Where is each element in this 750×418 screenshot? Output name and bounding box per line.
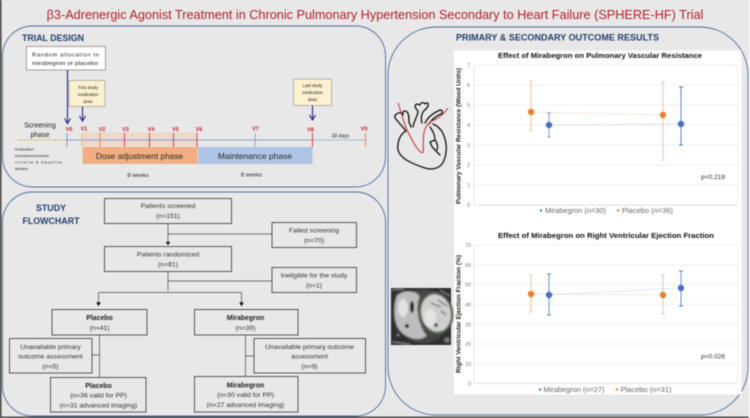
heading: study flowchart: STUDY: [36, 203, 67, 214]
box: ineligible: (n=1): [306, 282, 322, 290]
gridlines and axis: 60: [465, 263, 471, 269]
30 days label: 30 days: [332, 134, 350, 140]
box: first study medication dose: [69, 80, 105, 106]
visit labels: [66, 126, 367, 134]
visit labels: V9: [361, 126, 367, 132]
series: placebo: [528, 81, 666, 160]
icon: heart: [395, 103, 446, 169]
box: patients randomized: [104, 246, 232, 272]
dose adjustment phase bar: Dose adjustment phase: [96, 151, 183, 161]
dose adjustment phase bar: [82, 147, 198, 164]
gridlines and axis: 4: [467, 123, 470, 129]
icon: heart catheter: [398, 103, 448, 153]
box: placebo final: (n=31 advanced imaging): [60, 402, 137, 410]
box: placebo: Placebo: [86, 315, 113, 322]
title: β3-Adrenergic Agonist Treatment in Chronic Pulmonary Hypertension Secondary to Heart Failure (SPHERE-HF) Trial: [47, 8, 703, 22]
panel: primary and secondary outcome results: [388, 27, 748, 415]
box: placebo: (n=41): [90, 325, 109, 332]
box: ineligible: [272, 268, 356, 292]
gridlines and axis: 30: [465, 322, 471, 328]
screening phase label: [24, 122, 56, 139]
box: last study medication dose: [294, 79, 332, 106]
gridlines and axis: [465, 243, 738, 388]
box: mirabegron unavailable assessment: assessment: [291, 354, 328, 360]
gridlines and axis: 5: [467, 103, 470, 109]
panel: trial design: [2, 26, 386, 187]
box: failed screening: [272, 222, 356, 248]
visit labels: V4: [148, 127, 155, 133]
gridlines and axis: 10: [465, 362, 471, 368]
visit labels: V1: [81, 126, 87, 132]
box: mirabegron unavailable assessment: Unavailable primary outcome: [265, 344, 354, 351]
duration labels: 8 weeks: [241, 172, 262, 178]
heading: study flowchart: FLOWCHART: [22, 216, 80, 227]
box: failed screening: Failed screening: [289, 228, 339, 234]
box: random allocation: mirabegron or placebo: [32, 61, 98, 67]
chart: right ventricular ejection fraction: [456, 231, 738, 394]
evaluation note: studies.: [15, 166, 29, 171]
gridlines and axis: 50: [465, 282, 471, 288]
gridlines and axis: 40: [465, 302, 471, 308]
gridlines and axis: 1: [467, 183, 470, 189]
box: mirabegron final: (n=27 advanced imaging): [207, 402, 284, 409]
series: mirabegron: [546, 87, 684, 145]
box: mirabegron final: [194, 376, 298, 412]
box: mirabegron unavailable assessment: [254, 338, 366, 373]
y axis label: Right Ventricular Ejection Fraction (%): [456, 255, 462, 373]
box: placebo final: (n=36 valid for PP): [70, 392, 127, 400]
heading: study flowchart: [22, 203, 80, 227]
gridlines and axis: 70: [465, 243, 471, 249]
timeline shaded band: [82, 132, 197, 146]
gridlines and axis: 6: [467, 83, 470, 89]
gridlines and axis: 3: [467, 143, 470, 149]
legend: Mirabegron (n=30): [545, 206, 606, 215]
box: first study medication dose: First study: [78, 85, 99, 90]
box: last study medication dose: dose: [308, 97, 318, 102]
image: cardiac MRI: [391, 288, 456, 345]
box: placebo unavailable assessment: outcome assessment: [18, 354, 83, 360]
box: first study medication dose: medication: [78, 92, 99, 97]
box: placebo unavailable assessment: (n=5): [42, 364, 59, 370]
screening phase label: phase: [30, 132, 50, 139]
legend: [540, 206, 673, 215]
legend: Placebo (n=36): [622, 206, 673, 215]
gridlines and axis: 0: [468, 382, 471, 388]
gridlines and axis: 20: [465, 342, 471, 348]
duration labels: [127, 172, 262, 179]
visit labels: V0: [66, 127, 72, 133]
evaluation note: Evaluation: [15, 146, 34, 152]
heading: outcome results: PRIMARY & SECONDARY OUTCOME RESULTS: [456, 32, 659, 44]
chart title: Effect of Mirabegron on Right Ventricular Ejection Fraction: [498, 231, 714, 240]
screening phase label: Screening: [24, 122, 56, 130]
visit labels: V2: [99, 127, 105, 133]
box: placebo unavailable assessment: Unavailable primary: [20, 344, 81, 351]
box: random allocation: Random allocation to: [32, 52, 99, 58]
gridlines and axis: 7: [467, 63, 470, 69]
evaluation note: criteria & baseline: [15, 160, 63, 164]
gridlines and axis: 0: [467, 203, 470, 209]
connectors: [92, 223, 272, 377]
visit labels: V8: [307, 128, 314, 134]
p value: p=0.026: [701, 354, 725, 360]
box: patients randomized: (n=81): [158, 262, 178, 268]
evaluation note: inclusion/exclusion: [15, 153, 49, 158]
panel: study flowchart: [2, 192, 386, 416]
box: last study medication dose: medication: [302, 90, 323, 95]
box: patients screened: [104, 198, 232, 224]
box: placebo final: [50, 378, 146, 412]
arrow: last dose to V8: [310, 106, 316, 120]
box: ineligible: Ineligible for the study: [281, 272, 348, 280]
legend: Mirabegron (n=27): [544, 385, 604, 394]
box: mirabegron: (n=39): [236, 325, 255, 332]
timeline: [18, 133, 366, 147]
p value: p=0.218: [701, 174, 725, 181]
box: patients randomized: Patients randomized: [137, 252, 199, 258]
gridlines and axis: 2: [467, 163, 470, 169]
series: placebo: [528, 275, 666, 314]
duration labels: 8 weeks: [127, 173, 149, 179]
legend: Placebo (n=31): [620, 385, 672, 394]
box: random allocation: [26, 46, 106, 70]
visit labels: V3: [122, 127, 129, 133]
box: first study medication dose: dose: [83, 99, 93, 104]
y axis label: Pulmonary Vascular Resistance (Wood Units): [456, 68, 462, 204]
box: mirabegron: [194, 310, 298, 335]
visit labels: V7: [252, 126, 259, 132]
box: placebo final: Placebo: [85, 383, 112, 390]
box: patients screened: Patients screened: [141, 203, 196, 210]
chart title: Effect of Mirabegron on Pulmonary Vascular Resistance: [498, 51, 702, 60]
maintenance phase bar: [198, 147, 312, 164]
evaluation note: [15, 146, 63, 171]
gridlines and axis: [467, 63, 738, 209]
visit labels: V5: [172, 127, 179, 133]
box: mirabegron unavailable assessment: (n=9): [301, 364, 318, 370]
box: mirabegron final: Mirabegron: [227, 382, 264, 390]
legend: [539, 385, 672, 394]
box: mirabegron: Mirabegron: [227, 315, 264, 322]
chart: pulmonary vascular resistance: [456, 51, 738, 215]
arrow: first dose to V1: [80, 106, 86, 121]
box: placebo unavailable assessment: [10, 338, 92, 373]
box: patients screened: (n=151): [156, 213, 180, 220]
box: failed screening: (n=70): [304, 238, 324, 244]
visit labels: V6: [196, 127, 202, 133]
series: mirabegron: [546, 271, 684, 315]
arrow: randomization to V0: [64, 70, 70, 124]
heading: trial design: TRIAL DESIGN: [22, 33, 84, 44]
box: last study medication dose: Last study: [303, 83, 323, 88]
box: mirabegron final: (n=30 valid for PP): [217, 392, 274, 399]
box: placebo: [52, 310, 147, 335]
chart background: [454, 50, 742, 394]
maintenance phase bar: Maintenance phase: [218, 151, 292, 161]
